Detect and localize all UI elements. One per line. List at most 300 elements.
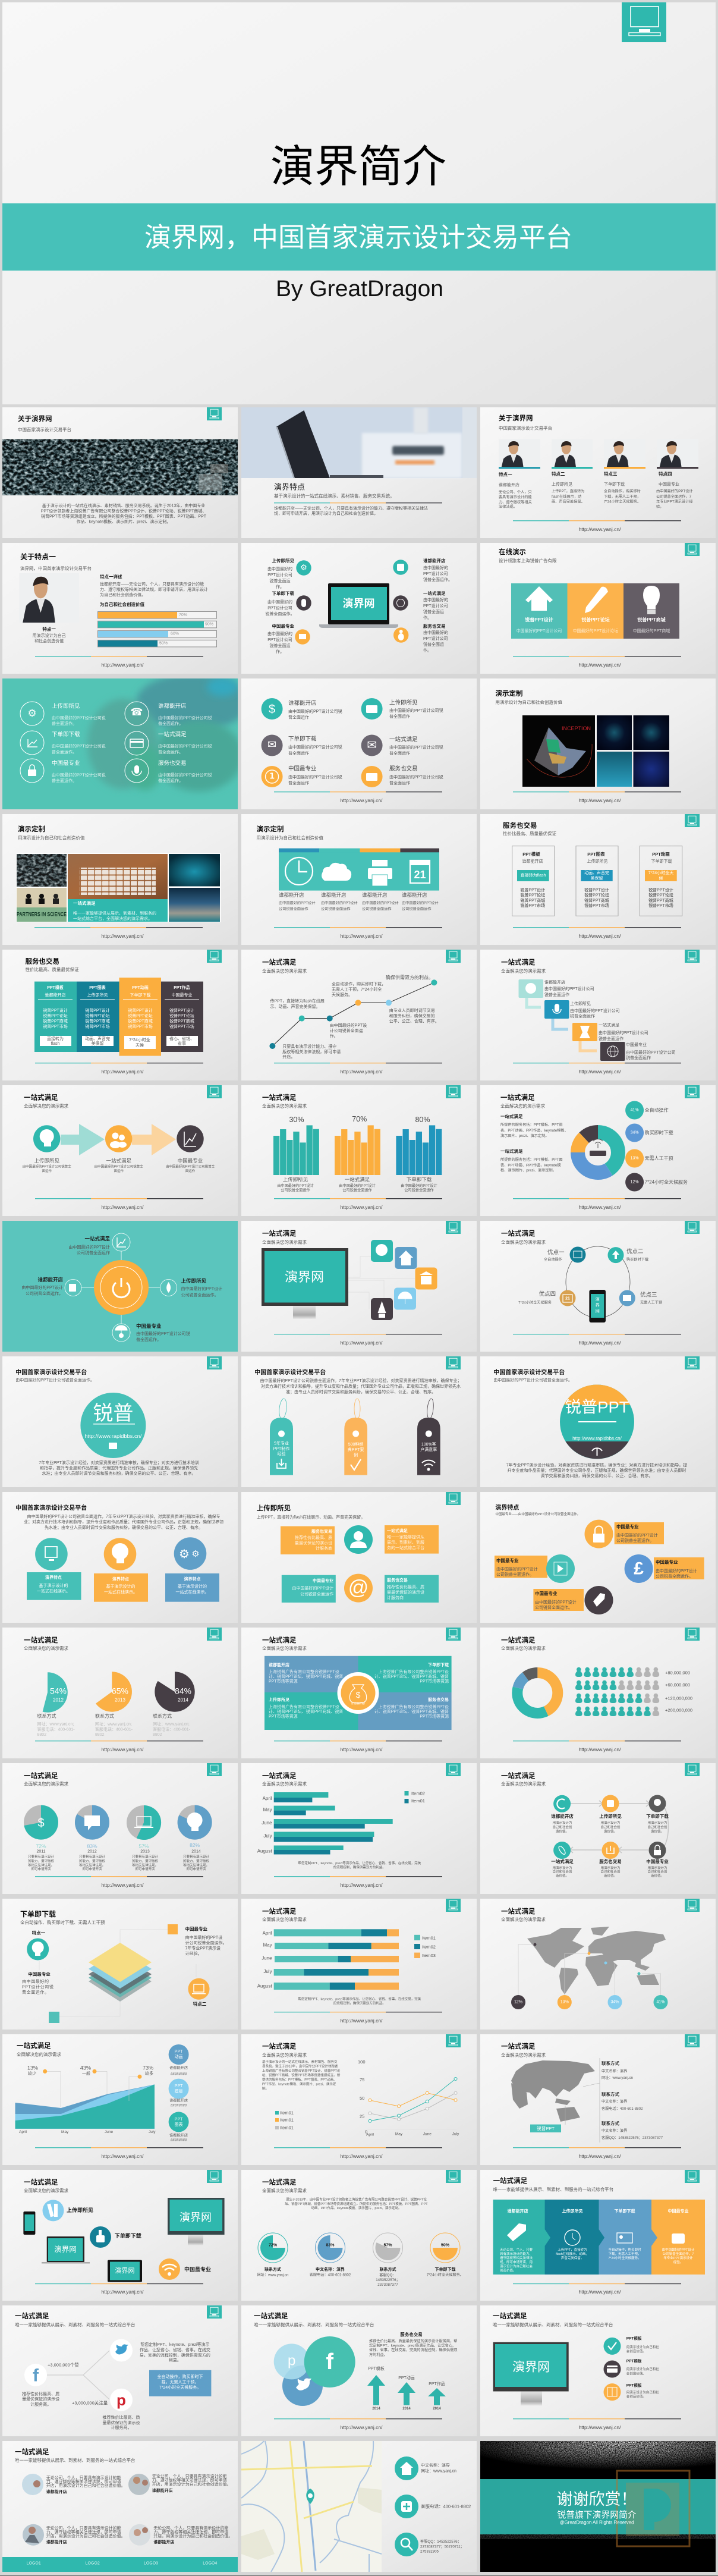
body text: PPT设计领跑者上海锐普广告有限公司整合锐普PPT设计、锐普PPT论坛、锐普PPT商城、 bbox=[41, 508, 206, 513]
icon: at sign: @ bbox=[348, 1576, 369, 1599]
icon: monitor tag bbox=[207, 407, 222, 420]
contact: qq bbox=[395, 2533, 464, 2556]
chart captions bbox=[277, 1176, 437, 1192]
fork lines bbox=[47, 2351, 109, 2399]
legend: Item01 bbox=[411, 1798, 425, 1804]
pie: 54 percent: 2012 bbox=[53, 1697, 64, 1703]
side bubbles: ######## bbox=[171, 2138, 187, 2142]
feature two: 上传PPT，直接转为 bbox=[552, 489, 584, 494]
body text: 准；由专业人员即时调节交易和服务纠纷，确保交易的公平、公正、合理、有序。 bbox=[286, 1388, 436, 1394]
top labels: 自己和社会创 bbox=[600, 1824, 621, 1829]
gauge 50 percent: 下单即下载 bbox=[435, 2267, 455, 2272]
chart captions: 上传即所见 bbox=[283, 1176, 308, 1182]
donut chart bbox=[517, 1673, 558, 1713]
feature two: 上传即所见 bbox=[552, 482, 572, 486]
step icons bbox=[33, 1125, 204, 1152]
footer url: http://www.yanj.cn/ bbox=[341, 2018, 383, 2024]
card teal: 一站式在线演示。 bbox=[37, 1588, 70, 1594]
tag: cases bbox=[344, 1399, 367, 1475]
heading: 中国首家演示设计交易平台 bbox=[493, 1368, 565, 1376]
panel: asia map contacts bbox=[480, 2034, 716, 2165]
column three highlighted: 下单即下载 bbox=[130, 992, 151, 998]
subheading: 全面解决您的演示需求 bbox=[501, 1239, 546, 1245]
card: service two bbox=[385, 1575, 439, 1603]
body text: 作品、keynote模板、演示图片、prezi、演示定制。 bbox=[77, 519, 171, 524]
column one teal: 谁都能开店 bbox=[508, 2209, 528, 2213]
legend bubbles: 购买即时下载 bbox=[645, 1130, 673, 1136]
icon: monitor tag bbox=[446, 2034, 461, 2047]
card: professional: 由中国最好的PPT设计 bbox=[292, 1585, 333, 1590]
annotations: 示、动画、声音完美保留。 bbox=[270, 1004, 320, 1009]
right features: 作。 bbox=[423, 647, 432, 653]
captions: 谁都能开店 bbox=[402, 892, 427, 898]
icon: monitor tag bbox=[685, 1085, 700, 1098]
annotations: 计公司锐普全面运 bbox=[330, 1028, 363, 1033]
contact text: 客服电话：400-601- bbox=[153, 1726, 191, 1732]
body text: 和指导，提升专业度和作品质量；代理国外专业公司作品，正版和正规，确保世界领先 bbox=[40, 1465, 198, 1470]
brand circle: 锐普 bbox=[93, 1402, 133, 1425]
icon: printer bbox=[368, 860, 392, 886]
column two dark teal: 上传PPT，直接转为 bbox=[558, 2247, 587, 2252]
annotations bbox=[270, 974, 439, 1059]
panel: teal hub and spoke bbox=[2, 1221, 238, 1352]
value bubbles: 12% bbox=[514, 2000, 522, 2004]
left column text: 由中国最好的PPT设计公司锐 bbox=[288, 744, 342, 749]
subheading: 性价比最高、质量最优保证 bbox=[25, 966, 79, 972]
contact: site bbox=[395, 2456, 456, 2480]
monitor bbox=[168, 2198, 225, 2245]
feature bottom: 由中国最好的PPT设计 bbox=[535, 1599, 577, 1604]
text block one: 表、PPT动画、PPT作品、keynote模板、 bbox=[500, 1127, 568, 1132]
tag: cases: 例 bbox=[354, 1452, 358, 1457]
node: pinterest bbox=[110, 2389, 133, 2411]
step three: 一站式满足 bbox=[599, 1022, 619, 1028]
right column text: 普全面运作 bbox=[389, 750, 410, 755]
column two: 上传即所见 bbox=[87, 992, 108, 998]
body text: 业；对卖方进行技术培训和指导，提升专业度和作品质量；代理国外专业公司作品，正版和正规，确保世界领 bbox=[24, 1519, 223, 1524]
disc 2013: 的能力、遵守版权 bbox=[132, 1859, 158, 1864]
contact list: 中文名称：演界 bbox=[602, 2099, 627, 2104]
gauge 50 percent: 7*24小时全天候服务。 bbox=[427, 2273, 464, 2277]
right features: PPT设计公司 bbox=[423, 603, 448, 608]
step labels: 由中国最好的PPT设计公司锐普全 bbox=[166, 1164, 215, 1169]
card two: 锐普PPT设计 bbox=[584, 887, 609, 892]
area chart bbox=[15, 2084, 155, 2129]
node: pinterest: p bbox=[116, 2391, 126, 2409]
column four orange: 中国最专业 bbox=[668, 2209, 688, 2213]
contact list: 中文名称：演界 bbox=[602, 2128, 627, 2132]
caption bbox=[33, 626, 66, 643]
left feature: 普全面运作。 bbox=[22, 1989, 49, 1994]
image: keyboard bbox=[68, 854, 168, 899]
heading: 一站式满足 bbox=[501, 2042, 536, 2050]
contact text: 联系方式 bbox=[37, 1713, 56, 1719]
subheading: 全面解决您的演示需求 bbox=[262, 1780, 307, 1786]
column four: 中国最专业 bbox=[171, 992, 193, 998]
logo band: LOGO4 bbox=[203, 2562, 217, 2565]
column one teal: 无论公司、个人，只要 bbox=[500, 2247, 533, 2252]
text block: 制。 bbox=[262, 2086, 269, 2091]
description two: 计服务商。 bbox=[111, 2424, 132, 2430]
icon: calendar bbox=[410, 860, 430, 883]
panel: about with city photo bbox=[2, 407, 238, 538]
column one teal: 具有演示设计的能力、 bbox=[500, 2251, 533, 2256]
chart captions: 一站式满足 bbox=[345, 1176, 370, 1182]
disc 2013: 只要具有演示设计 bbox=[132, 1854, 158, 1859]
icon: monitor tag bbox=[446, 1899, 461, 1912]
subtitle: 演界网，中国首家演示设计交易平台 bbox=[144, 222, 572, 252]
image: blue sphere bbox=[634, 715, 669, 750]
body text: 坛、锐普PPT商城、锐普PPT市场等资源组建成立。所提供的服务包括：PPT模板、PPT图表、PPT bbox=[285, 2201, 428, 2206]
subheading: 基于演示设计的一站式在线演示、素材销售、服务交易系统。 bbox=[274, 492, 395, 498]
chart axis labels: June bbox=[105, 2130, 113, 2134]
bottom right text: 上海锐普广告有限公司整合锐普PPT设 bbox=[378, 1704, 449, 1709]
diamond layers bbox=[89, 1943, 152, 2002]
chart: 80 percent: 80% bbox=[415, 1116, 430, 1124]
bottom text: 普全面运作。 bbox=[136, 1337, 161, 1342]
card three: 下单即下载 bbox=[651, 859, 672, 863]
heading: 一站式满足 bbox=[262, 1093, 297, 1101]
arrow: step one bbox=[61, 1124, 105, 1155]
point one: 用演示设计为自己和社 bbox=[626, 2345, 659, 2349]
annotations: 公平、公正、合理、有序。 bbox=[389, 1018, 439, 1023]
icon: monitor tag bbox=[446, 1221, 461, 1234]
left column text: 普全面运作 bbox=[288, 780, 309, 785]
footer url: http://www.yanj.cn/ bbox=[579, 1746, 621, 1752]
card: service two: 推荐性价比最高、质 bbox=[387, 1584, 424, 1589]
footer url: http://www.yanj.cn/ bbox=[579, 662, 621, 668]
heading: 一站式满足 bbox=[501, 1636, 536, 1644]
monitor: 演界网 bbox=[512, 2361, 550, 2374]
caption: 特点一 bbox=[42, 626, 56, 632]
callout box bbox=[149, 2370, 211, 2396]
body text: 由中国最好的PPT设计公司锐普全面运作。7年专业PPT演示设计经验，对卖家资质进行精准审核，确保专 bbox=[27, 1513, 221, 1519]
gauge 83 percent bbox=[310, 2233, 351, 2277]
map label: 锐普PPT bbox=[537, 2125, 555, 2131]
icon: monitor tag bbox=[207, 1356, 222, 1369]
feature: download bbox=[90, 2226, 141, 2248]
tag: experience: PPT制作 bbox=[273, 1446, 289, 1451]
people row 1 bbox=[575, 1667, 660, 1677]
panel: stacked bar chart bbox=[241, 1899, 477, 2030]
column one: 锐普PPT设计 bbox=[43, 1007, 68, 1013]
street map bbox=[241, 2441, 382, 2572]
legend bbox=[414, 1935, 436, 1958]
testimonial three: 力、遵守版权等相关法律法规，即可申请 bbox=[46, 2529, 121, 2534]
subtitle band bbox=[2, 203, 716, 271]
card three: 候 bbox=[659, 875, 663, 880]
card teal: 演界特点 bbox=[45, 1575, 62, 1580]
value bubbles: 41% bbox=[656, 2000, 665, 2004]
legend bubbles: 41% bbox=[631, 1108, 639, 1112]
caption: 和社会创造价值 bbox=[34, 637, 64, 643]
description two: 量最优保证的演示设 bbox=[102, 2420, 140, 2425]
progress bars: 50% bbox=[159, 642, 168, 646]
column one: 谁都能开店 bbox=[45, 992, 65, 998]
note text: 的流程控制，确保供需双方的利益。 bbox=[333, 2000, 386, 2005]
map label bbox=[530, 2125, 561, 2132]
gauge 57 percent: 2373087377 bbox=[377, 2282, 398, 2287]
subheading: 全面解决您的演示需求 bbox=[500, 1102, 545, 1108]
column one bbox=[34, 982, 77, 1052]
subheading: 用演示设计为自己和社会创造价值 bbox=[496, 699, 562, 705]
left text bbox=[21, 1277, 63, 1296]
left feature bbox=[22, 1930, 53, 1994]
description two: 推荐性价比最高、质 bbox=[102, 2414, 140, 2420]
heading: 一站式满足 bbox=[262, 2178, 297, 2186]
spokes bbox=[65, 1233, 177, 1342]
chart axes labels: 25 bbox=[360, 2113, 364, 2119]
panel: three step arrows bbox=[2, 1085, 238, 1216]
text block: 易系统。诞生于2013年，由中国专业PPT设计领跑者 bbox=[262, 2063, 338, 2068]
bottom left text bbox=[269, 1697, 343, 1719]
people values: +200,000,000 bbox=[665, 1708, 692, 1713]
progress bars: 90% bbox=[205, 622, 213, 627]
body text: 诞生于2013年，由中国专业PPT设计领跑者上海锐普广告有限公司整合锐普PPT设计、锐普PPT论 bbox=[286, 2197, 427, 2201]
right column text: 由中国最好的PPT设计公司锐 bbox=[389, 708, 443, 712]
top left text bbox=[269, 1662, 343, 1683]
badge: income bbox=[338, 1672, 379, 1714]
panel: four features with portraits bbox=[480, 407, 716, 538]
chart callouts: 较多 bbox=[145, 2071, 153, 2076]
card two: 锐普PPT论坛 bbox=[584, 892, 609, 897]
testimonial two: 谁都能开店 bbox=[152, 2488, 173, 2493]
location dots bbox=[534, 1943, 641, 1975]
details text: 特点一详述 bbox=[100, 573, 122, 579]
tricolour circle bbox=[560, 1384, 634, 1459]
heading: 一站式满足 bbox=[262, 2042, 297, 2050]
feature two: 画、声音完美保留。 bbox=[552, 499, 585, 504]
icon: monitor tag bbox=[207, 950, 222, 963]
monitor: 演界网 bbox=[180, 2211, 212, 2223]
heading: 在线演示 bbox=[499, 548, 526, 556]
card teal bbox=[27, 1538, 81, 1600]
chart callouts: 13% bbox=[27, 2065, 38, 2071]
chart axes labels: 50 bbox=[360, 2096, 364, 2101]
disc 2012: 即可申请开店 bbox=[82, 1867, 102, 1871]
heading: 中国首家演示设计交易平台 bbox=[254, 1368, 326, 1376]
left text: 由中国最好的PPT设计 bbox=[21, 1284, 63, 1290]
footer url: http://www.yanj.cn/ bbox=[102, 662, 144, 668]
card: one stop: 展示、到素材、到服 bbox=[387, 1539, 424, 1545]
contact list: 中文名称：演界 bbox=[602, 2068, 627, 2073]
callout box: 全自动操作，购买即时下 bbox=[157, 2374, 203, 2379]
card: service: 服务也交易 bbox=[311, 1528, 332, 1534]
feature right: 公司锐普全面运作。 bbox=[656, 1573, 693, 1578]
bars: July bbox=[274, 1969, 399, 1975]
testimonial three: 开店，用演示设计为自己和社会创造价值。 bbox=[46, 2533, 125, 2538]
bottom left text: PPT市场等资源 bbox=[269, 1713, 298, 1719]
bottom labels bbox=[551, 1858, 669, 1878]
thanks heading: 谢谢欣赏！ bbox=[556, 2490, 637, 2508]
side bubbles: 谁都能开店 bbox=[169, 2066, 188, 2071]
pie: 54 percent bbox=[43, 1672, 68, 1713]
heading: 演界特点 bbox=[495, 1503, 519, 1512]
chart axes labels: June bbox=[423, 2132, 432, 2136]
card orange: 演界特点 bbox=[112, 1576, 129, 1582]
chart captions: 由中国最好的PPT设计 bbox=[277, 1183, 314, 1188]
right text: 公司锐普全面运作。 bbox=[181, 1292, 219, 1298]
legend: Item02 bbox=[411, 1791, 425, 1796]
step three: 锐普全面运作 bbox=[599, 1036, 623, 1041]
feature four: 由中国最好的PPT设计 bbox=[656, 489, 693, 494]
icon: clock bbox=[285, 857, 313, 885]
top labels: 上传即所见 bbox=[599, 1813, 622, 1819]
bottom labels: 服务也交易 bbox=[599, 1858, 622, 1864]
heading: 演示定制 bbox=[496, 689, 523, 698]
contact: qq: 客服QQ：1453522576； bbox=[420, 2539, 461, 2544]
top labels: 造价值。 bbox=[556, 1829, 569, 1834]
left features: 上传即所见 bbox=[272, 558, 294, 564]
tag: satisfaction: 100%客 bbox=[421, 1441, 436, 1446]
testimonial three bbox=[23, 2524, 125, 2546]
right features bbox=[393, 558, 452, 653]
subheading: 全面解决您的演示需求 bbox=[24, 2187, 68, 2193]
right column text: 普全面运作 bbox=[389, 714, 410, 718]
chart axes labels: 100 bbox=[358, 2059, 366, 2065]
annotations: 天候服务。 bbox=[332, 992, 352, 997]
gauge 83 percent: 83% bbox=[326, 2243, 335, 2248]
icon circles: ✉ bbox=[267, 739, 276, 751]
feature four: 公司锐普全面运作，7 bbox=[656, 494, 692, 498]
column three blue: 下载，无需人工干预， bbox=[608, 2251, 641, 2256]
legend bubbles: 无需人工干预 bbox=[645, 1155, 673, 1161]
panel: donut and people rows bbox=[480, 1628, 716, 1758]
bottom labels: 自己和社会创 bbox=[600, 1870, 621, 1874]
connector lines bbox=[348, 1256, 415, 1309]
card: professional: 公司锐普全面运作 bbox=[300, 1591, 333, 1596]
heading: 中国首家演示设计交易平台 bbox=[15, 1504, 87, 1512]
people row 4 bbox=[575, 1706, 660, 1716]
month axis: April bbox=[263, 1930, 272, 1936]
testimonial two: 开店，用演示设计为自己和社会创造价值。 bbox=[152, 2481, 231, 2487]
arrow: 2014 template: 2014 bbox=[372, 2407, 380, 2411]
step four bbox=[600, 1042, 676, 1061]
gauge 50 percent: 50% bbox=[441, 2243, 450, 2248]
badge: income: $ bbox=[356, 1690, 361, 1699]
annotations: 全自动操作，购买即时下载， bbox=[332, 981, 386, 986]
node: facebook: 计服务商。 bbox=[30, 2401, 51, 2407]
side bubbles: 模板 bbox=[175, 2088, 183, 2093]
testimonial four: 开店，用演示设计为自己和社会创造价值。 bbox=[153, 2533, 232, 2538]
subheading: 上传PPT，直接转为flash在线展示、动画、声音完美保留。 bbox=[257, 1514, 365, 1520]
panel: four icon tiles bbox=[241, 814, 477, 945]
chart axis labels: April bbox=[19, 2130, 27, 2134]
icon: router bbox=[590, 1139, 606, 1156]
month axis bbox=[257, 1930, 272, 1988]
contact: site: 中文名称：演界 bbox=[421, 2462, 450, 2468]
left features: ⚙ bbox=[300, 564, 307, 572]
top left text: 计、锐普PPT论坛、锐普PPT商城、锐普 bbox=[269, 1673, 343, 1679]
subheading: 全面解决您的演示需求 bbox=[262, 1645, 307, 1651]
panel: four testimonials with logos bbox=[2, 2441, 238, 2572]
panel: online demo three tiles bbox=[480, 543, 716, 674]
bottom labels: 自己和社会创 bbox=[647, 1870, 667, 1874]
top right text: 上海锐普广告有限公司整合锐普PPT设 bbox=[378, 1669, 449, 1674]
left text: 由中国最好的PPT设计公司锐 bbox=[52, 743, 106, 748]
top labels: 造价值。 bbox=[651, 1829, 664, 1834]
month axis: August bbox=[257, 1848, 272, 1854]
process flow arrows bbox=[569, 1801, 668, 1853]
right column text: 由中国最好的PPT设计公司锐 bbox=[389, 744, 443, 749]
heading: 一站式满足 bbox=[17, 2041, 51, 2050]
feature three: 下载，无需人工干预， bbox=[604, 494, 641, 498]
arrow: 2014 animation: PPT动画 bbox=[398, 2375, 415, 2380]
step four: 锐普全面运作 bbox=[626, 1055, 651, 1060]
world map bbox=[527, 1927, 666, 1994]
disc 2014: 2014 bbox=[191, 1849, 201, 1854]
right features: 谁都能开店 bbox=[423, 558, 446, 564]
chart callouts bbox=[27, 2065, 153, 2107]
card three: 锐普PPT论坛 bbox=[648, 892, 673, 897]
panel: four round features with orange cards bbox=[480, 1492, 716, 1623]
column three highlighted: 锐普PPT商城 bbox=[128, 1018, 153, 1023]
card two: 美保留 bbox=[591, 875, 603, 880]
column four: 锐普PPT商城 bbox=[169, 1018, 194, 1023]
hub: power button bbox=[94, 1260, 149, 1315]
column one teal: 创造价值。 bbox=[500, 2268, 517, 2273]
chart captions: 下单即下载 bbox=[407, 1176, 432, 1182]
heading: 服务也交易 bbox=[25, 957, 59, 966]
contact list: 联系方式 bbox=[602, 2091, 619, 2097]
heading: 一站式满足 bbox=[15, 2448, 49, 2456]
top labels: 下单即下载 bbox=[646, 1813, 669, 1819]
subheading: 全面解决您的演示需求 bbox=[24, 1645, 68, 1651]
gauge 72 percent bbox=[257, 2233, 289, 2277]
card three: 7*24小时全天 bbox=[648, 869, 673, 875]
right feature bbox=[185, 1925, 227, 2006]
panel: devices and features bbox=[2, 2170, 238, 2301]
subheading: 中国最专业——由中国最好的PPT设计公司锐普全面运作。 bbox=[495, 1512, 580, 1516]
counters: +3,000,000个赞 bbox=[48, 2362, 79, 2368]
column four: 锐普PPT市场 bbox=[169, 1023, 194, 1029]
card: service bbox=[281, 1526, 335, 1554]
subheading: 用演示设计为自己和社会创造价值 bbox=[257, 835, 323, 841]
body text: 动画、PPT作品、keynote模板、演示图片、prezi、演示定制。 bbox=[311, 2206, 401, 2210]
right features: PPT设计公司 bbox=[423, 635, 448, 641]
testimonial four: 力、遵守版权等相关法律法规，即可申请 bbox=[153, 2529, 228, 2534]
subheading: 由中国最好的PPT设计公司锐普全面运作。 bbox=[15, 1377, 95, 1383]
text block two: 板、演示图片、prezi、演示定制。 bbox=[500, 1168, 556, 1173]
card teal: 基于演示设计的 bbox=[39, 1582, 68, 1588]
left features: 中国最专业 bbox=[272, 623, 294, 629]
donut chart bbox=[578, 1132, 618, 1173]
people values bbox=[665, 1670, 692, 1713]
logo band: LOGO3 bbox=[144, 2562, 158, 2565]
chart captions: 由中国最好的PPT设计 bbox=[339, 1183, 376, 1188]
right column text: 普全面运作 bbox=[389, 780, 410, 785]
image: inception chart bbox=[522, 715, 595, 787]
card: service: 推荐性价比最高、质 bbox=[295, 1534, 332, 1540]
top labels: 谁都能开店 bbox=[551, 1813, 574, 1819]
image: success diagram bbox=[597, 752, 632, 787]
point one bbox=[604, 2336, 659, 2355]
heading: 一站式满足 bbox=[501, 1229, 536, 1237]
chart axes labels: 75 bbox=[360, 2077, 364, 2082]
step one: 由中国最好的PPT设计公司 bbox=[544, 986, 594, 991]
bars: June bbox=[275, 1956, 399, 1962]
heading: 一站式满足 bbox=[262, 1771, 297, 1780]
annotations: 确保供需双方的利益。 bbox=[386, 974, 433, 980]
right feature: 计公司锐普全面运作。 bbox=[185, 1940, 227, 1945]
gauge 57 percent: 客服QQ： bbox=[379, 2273, 396, 2277]
right feature: 由中国最好的PPT设 bbox=[185, 1934, 222, 1940]
heading: 一站式满足 bbox=[254, 2311, 288, 2320]
tile: forum: 中国最好的PPT设计论坛 bbox=[573, 628, 618, 633]
callout box: 载，无需人工干预， bbox=[162, 2379, 199, 2385]
people values: +60,000,000 bbox=[665, 1682, 690, 1688]
top text bbox=[68, 1236, 110, 1255]
